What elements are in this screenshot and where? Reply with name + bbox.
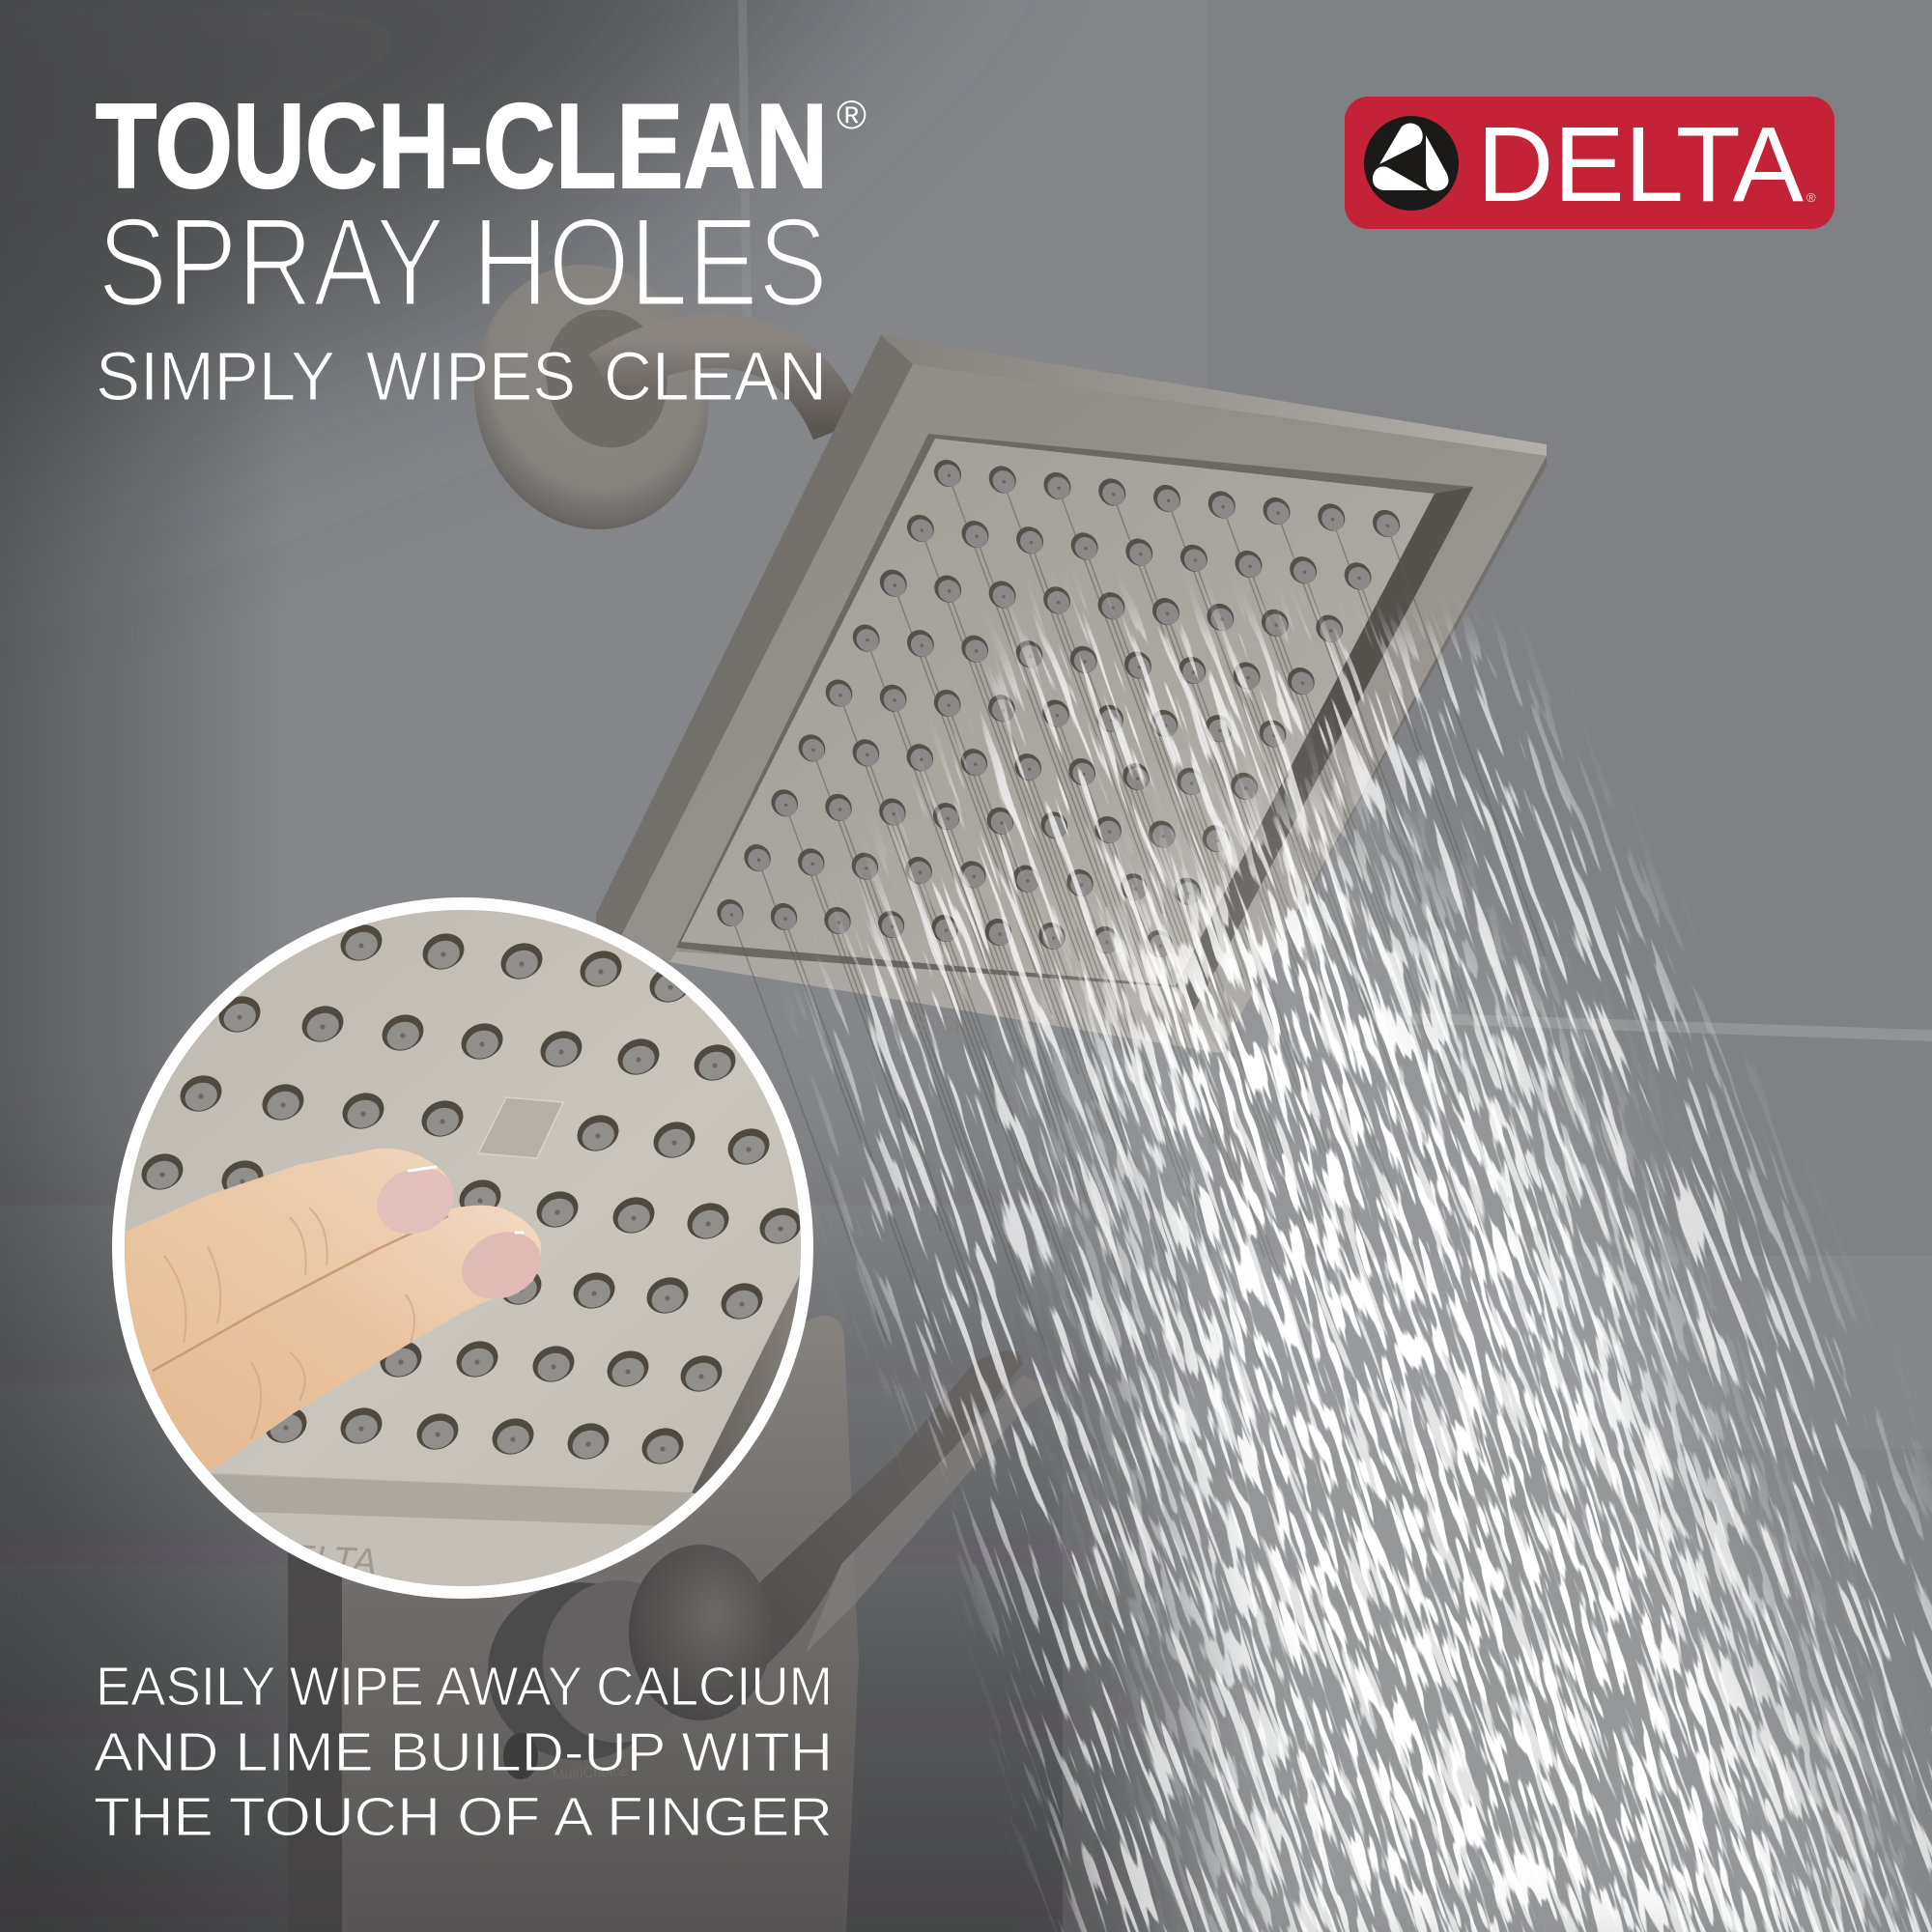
shower head	[596, 335, 1547, 1371]
shower arm and wall flange	[446, 240, 838, 554]
heading bold line: TOUCH-CLEAN	[96, 80, 828, 213]
lower nail	[451, 1219, 552, 1312]
upper finger	[97, 1149, 452, 1391]
lower lip	[253, 1513, 655, 1586]
upper nail	[367, 1156, 464, 1245]
lower finger	[97, 1206, 541, 1507]
square dimple	[478, 1097, 563, 1158]
front lip	[669, 952, 1220, 1053]
bottom description	[94, 1656, 833, 1848]
logo mark petals	[1373, 124, 1448, 191]
lip band	[212, 1474, 692, 1526]
finger crease	[153, 1216, 448, 1371]
knuckle wrinkles	[164, 1208, 414, 1439]
valve trim plate	[288, 1316, 859, 1932]
shower arm tube	[604, 341, 838, 430]
white ring	[112, 897, 813, 1599]
etched brand on head: DELTA	[883, 1003, 964, 1042]
inset contents	[125, 910, 801, 1586]
escutcheon	[288, 1316, 859, 1932]
magnified holes	[136, 919, 807, 1470]
dense droplets	[1024, 736, 1932, 1932]
plate surface	[125, 910, 801, 1492]
bottom description: EASILY WIPE AWAY CALCIUM	[96, 1656, 833, 1718]
nail highlights	[409, 1167, 523, 1233]
logo registered mark: ®	[1806, 190, 1816, 205]
model marking: MultiChoice	[552, 1763, 628, 1783]
magnified inset circle	[112, 897, 813, 1599]
left strip	[288, 1507, 342, 1932]
registered mark: ®	[837, 92, 867, 137]
spray glow	[1082, 753, 1913, 1932]
bottom description: THE TOUCH OF A FINGER	[94, 1786, 833, 1848]
flange plate	[446, 240, 736, 554]
lever hub	[629, 1545, 772, 1720]
handle rosette	[488, 1582, 671, 1760]
title block	[96, 80, 867, 415]
screw	[503, 1733, 538, 1779]
logo wordmark: DELTA	[1477, 105, 1804, 224]
sparse droplets	[802, 587, 1932, 1932]
spray plate	[681, 439, 1435, 985]
front frame	[618, 364, 1547, 1053]
bottom description: AND LIME BUILD-UP WITH	[94, 1721, 833, 1783]
subheading: WIPES	[366, 339, 576, 415]
recess	[676, 434, 1473, 1010]
recess dark side	[1176, 487, 1473, 1010]
top facet	[881, 335, 1547, 456]
lever translucent side	[806, 1375, 1051, 1653]
logo mark circle	[1364, 116, 1459, 211]
subheading	[96, 339, 827, 415]
outer body	[596, 335, 1547, 1053]
right shade	[692, 1275, 800, 1493]
heading light line: SPRAY HOLES	[98, 191, 828, 332]
water spray	[802, 587, 1932, 1932]
logo red badge	[1345, 97, 1834, 229]
etched brand: ELTA	[290, 1538, 378, 1583]
lever blade	[696, 1351, 1023, 1676]
Delta logo	[1345, 97, 1834, 229]
flange bell	[531, 297, 682, 461]
frame shade	[116, 898, 811, 1594]
lever handle	[488, 1351, 1051, 1783]
subheading: SIMPLY	[96, 339, 335, 415]
hub cylinder	[543, 1580, 694, 1743]
spray hole grid	[717, 458, 1546, 1371]
subheading: CLEAN	[604, 339, 827, 415]
